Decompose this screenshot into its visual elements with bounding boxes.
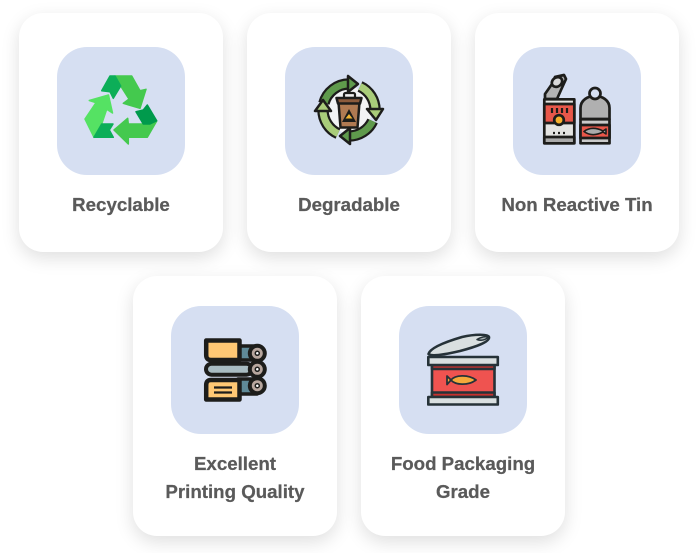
label: Excellent Printing Quality: Printing Quality [165,481,305,502]
card: Non Reactive Tin [475,13,679,252]
label: Recyclable: Recyclable [72,194,170,215]
icon: degradable bin with arrows [315,76,383,144]
icon: food can with fish [428,335,498,404]
icon tile: Food Packaging Grade [399,306,527,434]
icon: opened tin cans [544,75,610,143]
card: Food Packaging Grade [361,276,565,536]
card: Degradable [247,13,451,252]
card: Excellent Printing Quality [133,276,337,536]
label: Food Packaging Grade: Food Packaging [391,453,535,474]
icon tile: Degradable [285,47,413,175]
label: Excellent Printing Quality [165,453,305,502]
icon tile: Recyclable [57,47,185,175]
label: Food Packaging Grade: Grade [436,481,490,502]
icon tile: Non Reactive Tin [513,47,641,175]
icon: printing rolls [206,340,265,400]
icon tile: Excellent Printing Quality [171,306,299,434]
card: Recyclable [19,13,223,252]
icon: recycle symbol [85,76,157,144]
label: Food Packaging Grade [391,453,535,502]
label: Excellent Printing Quality: Excellent [194,453,276,474]
label: Non Reactive Tin: Non Reactive Tin [501,194,653,215]
label: Degradable: Degradable [298,194,400,215]
